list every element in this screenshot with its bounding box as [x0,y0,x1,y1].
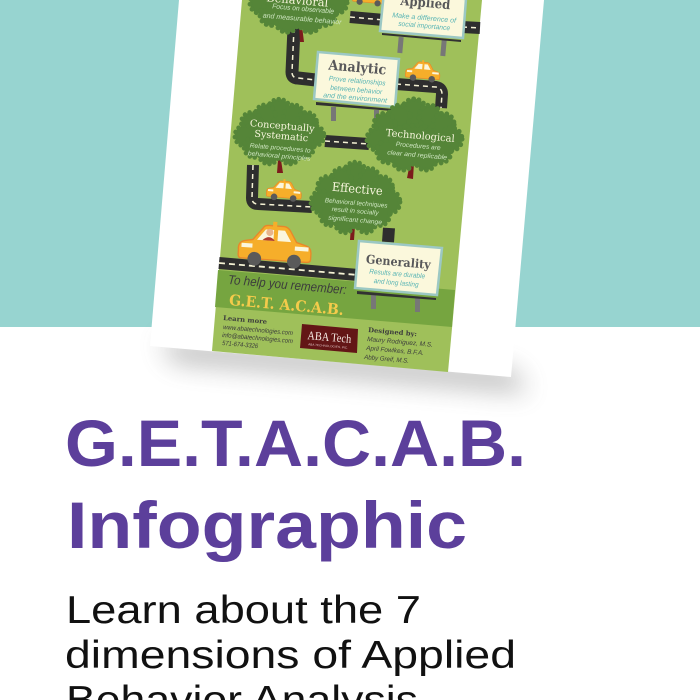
reminder line: To help you remember: [227,272,348,297]
tree: Conceptually Systematic [235,99,324,173]
billboard: Analytic: Analytic [327,57,387,79]
subtitle: Learn about the 7 [66,589,421,632]
tree: Technological: Procedures are [395,141,441,152]
billboard: Generality: and long lasting [373,278,419,289]
tree: Conceptually Systematic: Conceptually [249,118,316,135]
billboard: Analytic: and the environment [323,92,388,105]
tree: Effective [311,162,400,240]
billboard: Applied: social importance [398,21,450,32]
designers credit: Designed by: [368,326,417,338]
billboard: Generality: Generality [365,252,432,272]
car on left road [266,178,303,202]
tree: Conceptually Systematic: Systematic [254,129,309,144]
billboard: Applied [380,0,466,56]
billboard: Generality [355,241,442,312]
tree: Effective: Behavioral techniques [324,197,389,210]
designers credit: Maury Rodriguez, M.S. [367,336,433,349]
title [65,406,526,562]
billboard: Analytic: Prove relationships [328,76,386,88]
billboard: Generality: Results are durable [369,269,425,280]
tree: Technological: Technological [385,128,455,145]
billboard: Analytic [314,52,399,124]
title: Infographic [67,488,467,562]
contact block: Learn more [223,314,267,326]
tree: Technological [367,99,462,179]
road segments [219,17,480,275]
designers credit: Abby Greif, M.S. [363,354,409,365]
tree: Effective: significant change [328,215,383,226]
tree: Conceptually Systematic: behavioral principles [247,150,312,163]
tree: Behavioral: Focus on observable [272,3,334,16]
contact block: 571-674-3326 [222,340,259,350]
teal background band [0,0,700,327]
tree: Behavioral: and measurable behavior [262,13,342,26]
tree: Effective: Effective [331,180,383,198]
contact block [222,314,294,350]
tree: Conceptually Systematic: Relate procedures to [249,142,311,155]
title: G.E.T.A.C.A.B. [65,406,526,480]
ABA Tech logo: ABA Tech [307,328,352,346]
tree: Effective: result in socially [331,206,380,217]
designers credit [363,326,433,365]
car near Analytic [405,59,441,83]
tree: Behavioral [250,0,347,42]
mnemonic G.E.T. A.C.A.B.: G.E.T. A.C.A.B. [228,291,345,319]
billboard: Applied: Make a difference of [392,12,457,25]
ABA Tech logo [300,324,358,353]
contact block: info@abatechnologies.com [222,332,294,345]
designers credit: April Fowlkes, B.F.A. [365,345,424,357]
car on upper road [352,0,386,7]
subtitle: dimensions of Applied [65,634,516,677]
ABA Tech logo: ABA TECHNOLOGIES, INC. [308,342,348,350]
poster: tilted infographic sheet [150,0,544,377]
green poster background [212,0,482,372]
tree: Technological: clear and replicable [387,149,448,162]
poster drop shadow [160,340,528,392]
big taxi with driver [237,219,313,270]
subtitle [65,589,516,700]
white paper [150,0,544,377]
billboard: Analytic: between behavior [330,85,383,96]
darker green band [215,270,455,327]
contact block: www.abatechnologies.com [223,324,294,337]
